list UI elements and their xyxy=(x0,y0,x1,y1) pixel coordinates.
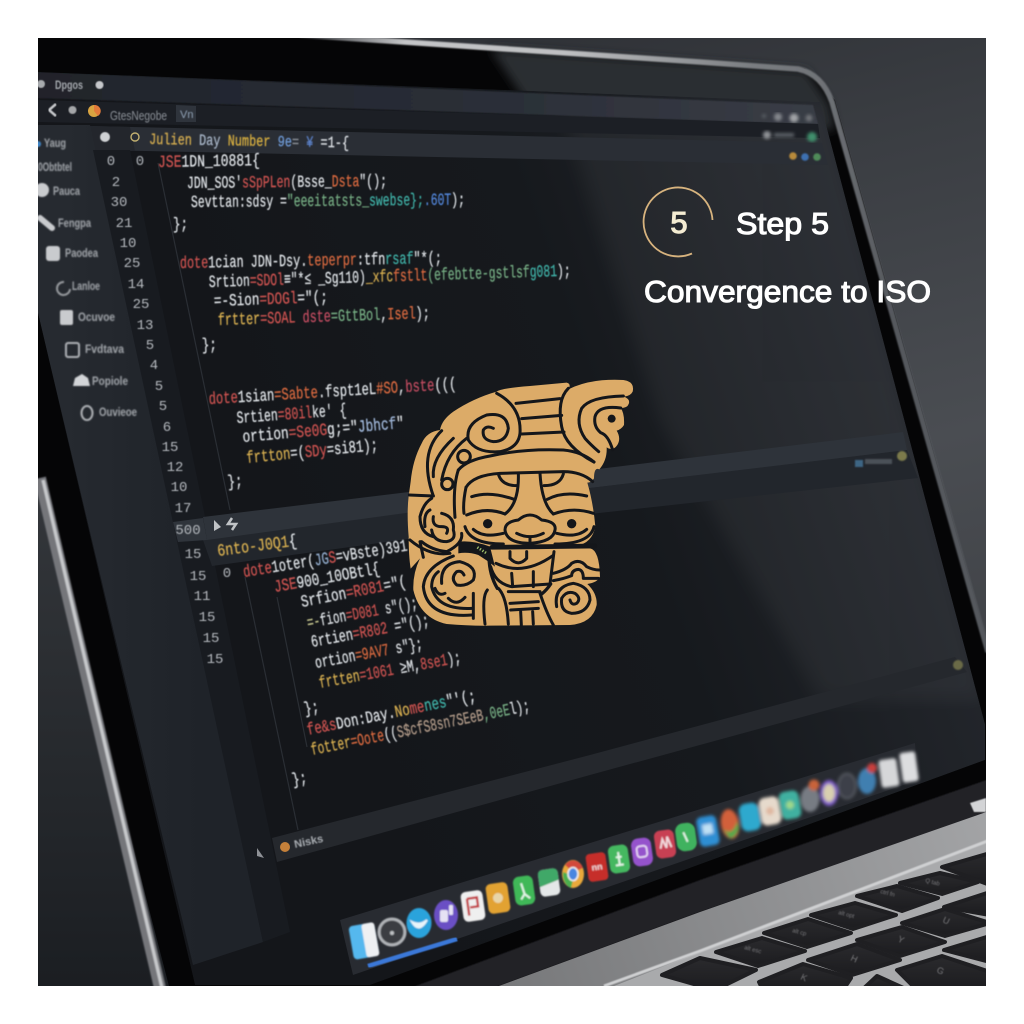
code block: upper: =-Sion=DOGl="(; xyxy=(214,289,328,312)
code block: upper: }; xyxy=(202,336,217,356)
sidebar items: Fvdtava xyxy=(85,342,124,356)
sidebar xyxy=(38,125,263,965)
code block: lower: JSE900_10OBtl{ xyxy=(273,561,381,598)
code block: upper: frtton=(SDy=si81); xyxy=(246,437,379,469)
file title: Julien Day Number 9e= ¥ =1-{ xyxy=(149,131,349,152)
near dock icons xyxy=(348,822,698,960)
icon: cyan tile xyxy=(738,801,762,833)
tab label: GtesNegobe xyxy=(110,108,167,123)
editor status dots xyxy=(789,152,821,161)
tray dots xyxy=(763,131,817,142)
code block: lower: }; xyxy=(303,699,321,720)
icon: green pill xyxy=(674,822,698,852)
line numbers: 15 xyxy=(199,610,215,626)
line numbers: 14 xyxy=(128,277,144,293)
step label: Step 5 xyxy=(736,206,829,241)
line numbers: 12 xyxy=(167,460,183,476)
line numbers: 4 xyxy=(150,358,158,374)
line numbers: 500 xyxy=(175,523,201,539)
line numbers: 0 xyxy=(136,154,144,170)
icon: purple tile xyxy=(630,837,654,867)
line numbers: 21 xyxy=(116,216,132,232)
line numbers: 15 xyxy=(190,569,206,585)
upper panel divider band xyxy=(173,432,918,566)
line numbers: 0 xyxy=(107,154,115,170)
code block: upper: Sevttan:sdsy ="eeeitatsts_swebse};.60T); xyxy=(191,192,465,213)
code block: upper: frtter=SOAL dste=GttBol,Isel); xyxy=(218,305,430,331)
code block: upper xyxy=(158,152,571,493)
line numbers: 2 xyxy=(112,175,120,191)
icon: red app xyxy=(585,852,609,882)
mask eyes xyxy=(483,415,616,528)
sidebar items: Ouvieoe xyxy=(99,405,137,419)
line numbers: 15 xyxy=(185,547,201,563)
menu label: Dpgos xyxy=(55,78,83,92)
badge ring xyxy=(644,187,712,256)
key legends: alt cp xyxy=(791,928,808,938)
badge number: 5 xyxy=(670,205,688,240)
icon: dark disc xyxy=(838,774,856,798)
line numbers xyxy=(107,154,231,668)
icon: color wheel xyxy=(820,780,838,806)
icon: green app xyxy=(512,875,536,906)
icon: mail app xyxy=(537,868,561,897)
code block: upper: }; xyxy=(173,216,188,235)
code block: upper: dote1sian=Sabte.fspt1eL#SO,bste((( xyxy=(208,376,457,410)
icon: red app: nn xyxy=(591,861,603,873)
key legends: Y xyxy=(896,934,906,945)
icon: Maya glyph mask xyxy=(408,380,633,626)
sidebar items: Popiole xyxy=(92,374,128,388)
sidebar items: Lanloe xyxy=(72,279,100,293)
mask silhouette xyxy=(408,380,633,626)
code block: upper: }; xyxy=(227,473,243,493)
key legends: K xyxy=(799,972,809,983)
key legends: alt esc xyxy=(743,945,762,955)
menu gear icon xyxy=(37,80,45,88)
file header band xyxy=(90,126,828,165)
icon: orange app xyxy=(485,882,511,914)
icon: white tile xyxy=(878,758,900,788)
line numbers: 17 xyxy=(175,501,191,517)
code block: lower xyxy=(216,533,532,791)
line numbers: 15 xyxy=(162,440,178,456)
key legends: U xyxy=(941,915,951,927)
far dock icons xyxy=(696,751,919,848)
key legends: ctrl fn xyxy=(879,889,895,899)
sidebar items: Fengpa xyxy=(58,216,91,230)
code block: lower: Srfion=R081="( xyxy=(300,574,408,613)
code block: lower: dote1oter(JGS=vBste)391 xyxy=(242,538,409,583)
menu bar status icons xyxy=(762,113,812,122)
code block: lower: 6rtien=R802 ="(); xyxy=(310,612,431,653)
key legends: H xyxy=(849,953,859,965)
line numbers: 15 xyxy=(203,631,219,647)
step title: Convergence to ISO xyxy=(644,274,931,309)
line numbers: 10 xyxy=(120,236,136,252)
code block: lower: fotter=Oote((S$cfS8sn7SEeB,0eEl); xyxy=(309,698,532,761)
line numbers: 5 xyxy=(146,338,154,354)
code block: lower: }; xyxy=(291,770,309,791)
line numbers: 10 xyxy=(171,480,187,496)
key legends xyxy=(743,878,951,983)
icon: finder xyxy=(348,922,380,960)
line numbers: 5 xyxy=(159,399,167,415)
mask notch xyxy=(458,541,495,567)
mask notch code speck xyxy=(477,547,487,553)
dock active indicator xyxy=(368,939,457,966)
code block: lower: =-fion=D081 s"(); xyxy=(306,595,419,634)
sidebar items: Pauca xyxy=(53,184,80,198)
icon: teal tile xyxy=(778,789,802,821)
icon: crimson tile xyxy=(653,829,677,859)
icon: grey disc xyxy=(800,780,820,812)
code block: lower: 6nto-J0Q1{ xyxy=(216,533,298,562)
icon: blue tile xyxy=(696,814,720,848)
code block: upper: Srtion=SDOl≡"*≤ _Sg110)_xfcfstlt(efebtte-gstlsfg081); xyxy=(209,263,571,293)
line numbers: 25 xyxy=(124,256,140,272)
sidebar items xyxy=(35,136,137,420)
sidebar items: 0Obtbtel xyxy=(38,160,72,174)
line numbers: 11 xyxy=(194,589,210,605)
code block: upper: JSE1DN_10881{ xyxy=(158,152,260,173)
code block: lower: frtten=1061 ≥M,8se1); xyxy=(318,649,463,694)
icon: photos xyxy=(719,808,741,840)
line numbers: 6 xyxy=(163,420,171,436)
icon: chrome xyxy=(562,860,584,888)
line numbers: 0 xyxy=(223,566,231,582)
indent guides xyxy=(158,163,307,830)
code block: upper: dote1cian JDN-Dsy.teperpr:tfnrsaf"*(; xyxy=(180,250,442,274)
code block: lower: fe&sDon:Day.Nomenes"'(; xyxy=(305,688,478,741)
mask line work xyxy=(409,388,623,625)
code block: upper: ortion=Se0Gg;="Jbhcf" xyxy=(242,415,405,448)
icon: cream tile xyxy=(758,795,782,827)
sidebar items: Yaug xyxy=(44,136,66,150)
sidebar items: Paodea xyxy=(65,246,98,260)
key legends: G xyxy=(935,965,946,977)
line numbers: 15 xyxy=(207,652,223,668)
lower panel band xyxy=(257,657,967,862)
tab toolbar: Vn xyxy=(180,109,193,121)
top menu bar xyxy=(37,72,818,124)
step badge xyxy=(644,187,712,256)
icon: blue app xyxy=(406,908,432,938)
key legends: Q tab xyxy=(924,878,941,888)
line numbers: 25 xyxy=(133,297,149,313)
code block: upper: Srtien=80ilke' { xyxy=(236,402,347,429)
icon: clock ring xyxy=(379,919,405,945)
code block: lower: ortion=9AV7 s"}; xyxy=(314,636,424,674)
line numbers: 30 xyxy=(111,195,127,211)
icon: blue disc xyxy=(858,763,877,794)
icon: purple app xyxy=(434,900,458,930)
line numbers: 13 xyxy=(137,318,153,334)
tab toolbar xyxy=(38,100,820,142)
app dock xyxy=(340,743,919,975)
line numbers: 5 xyxy=(155,379,163,395)
hinge and keyboard deck xyxy=(405,778,992,990)
code block: upper: JDN_SOS'sSpPLen(Bsse_Dsta"(); xyxy=(187,173,387,194)
panel status chip xyxy=(855,451,907,467)
icon: trash xyxy=(899,751,919,783)
sidebar items: Ocuvoe xyxy=(78,310,115,324)
icon: green tile xyxy=(607,844,631,874)
panel tab label: Nisks xyxy=(293,833,324,851)
keyboard keys xyxy=(662,853,990,990)
icon: white note xyxy=(460,890,486,922)
key legends: alt opt xyxy=(837,910,855,920)
